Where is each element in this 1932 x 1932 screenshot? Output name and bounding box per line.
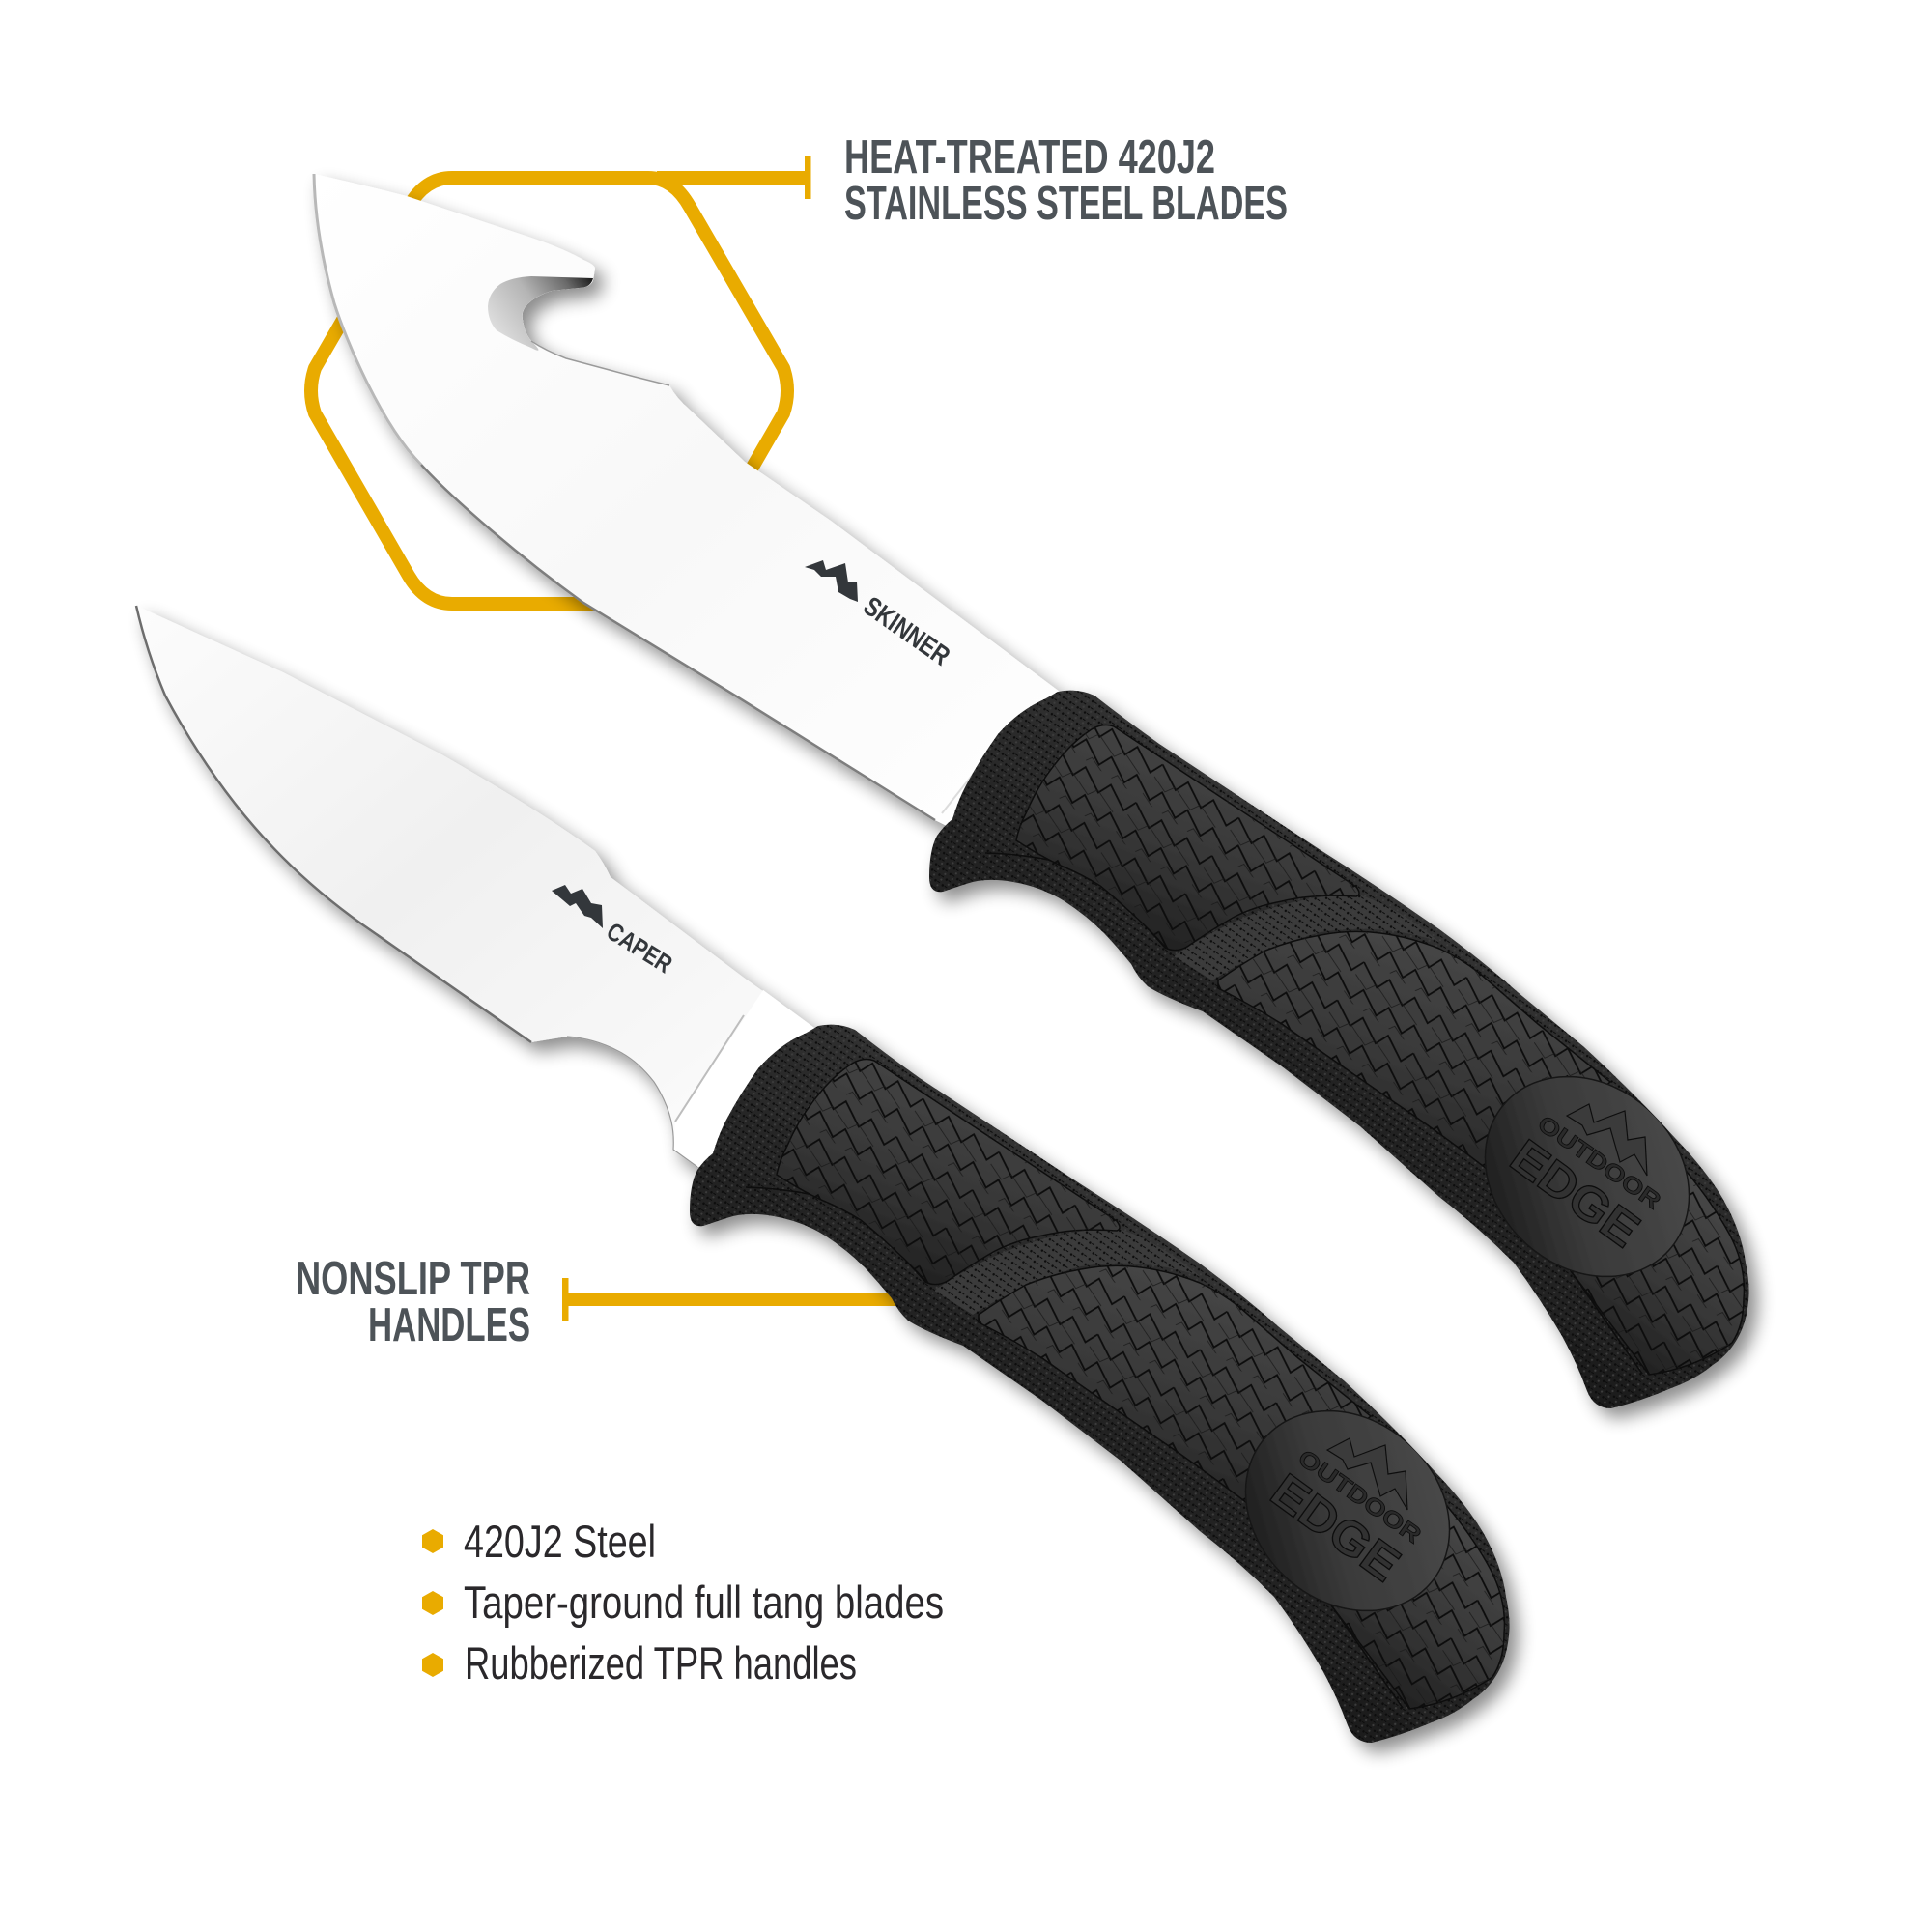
heading: blades [844, 131, 1288, 230]
heading: blades: STAINLESS STEEL BLADES [844, 178, 1288, 230]
bullet 1 [422, 1516, 656, 1567]
gut hook notch [488, 276, 593, 351]
infographic canvas [135, 139, 1770, 1763]
caper edge [136, 606, 531, 1042]
caper ricasso [673, 990, 814, 1167]
skinner logo text: EDGE [1501, 1129, 1650, 1258]
caper logo text: OUTDOOR [1293, 1445, 1426, 1548]
bullet 1: 420J2 Steel [464, 1516, 656, 1567]
knife: skinner [314, 174, 1749, 1408]
heading: handles: NONSLIP TPR [296, 1253, 530, 1305]
skinner handle [929, 691, 1749, 1408]
bullet 3: Rubberized TPR handles [465, 1637, 857, 1689]
connector: handles [562, 1278, 903, 1321]
heading: handles: HANDLES [368, 1299, 530, 1351]
caper blade [136, 606, 814, 1167]
hexagon outline [311, 178, 787, 604]
feature list [422, 1516, 944, 1689]
bullet 2: Taper-ground full tang blades [464, 1577, 944, 1628]
skinner logo text: OUTDOOR [1533, 1111, 1665, 1214]
blade mark: skinner: SKINNER [859, 591, 955, 671]
knife: caper [136, 606, 1510, 1743]
blade mark: caper [552, 885, 678, 979]
heading: handles [296, 1253, 530, 1351]
connector: blades [657, 156, 811, 199]
heading: blades: HEAT-TREATED 420J2 [844, 131, 1215, 184]
caper logo text: EDGE [1262, 1463, 1410, 1592]
caper handle [690, 1025, 1510, 1743]
skinner blade [314, 174, 1067, 831]
blade mark: caper: CAPER [602, 917, 678, 979]
blade mark: skinner [805, 560, 955, 671]
skinner edge [314, 174, 421, 465]
